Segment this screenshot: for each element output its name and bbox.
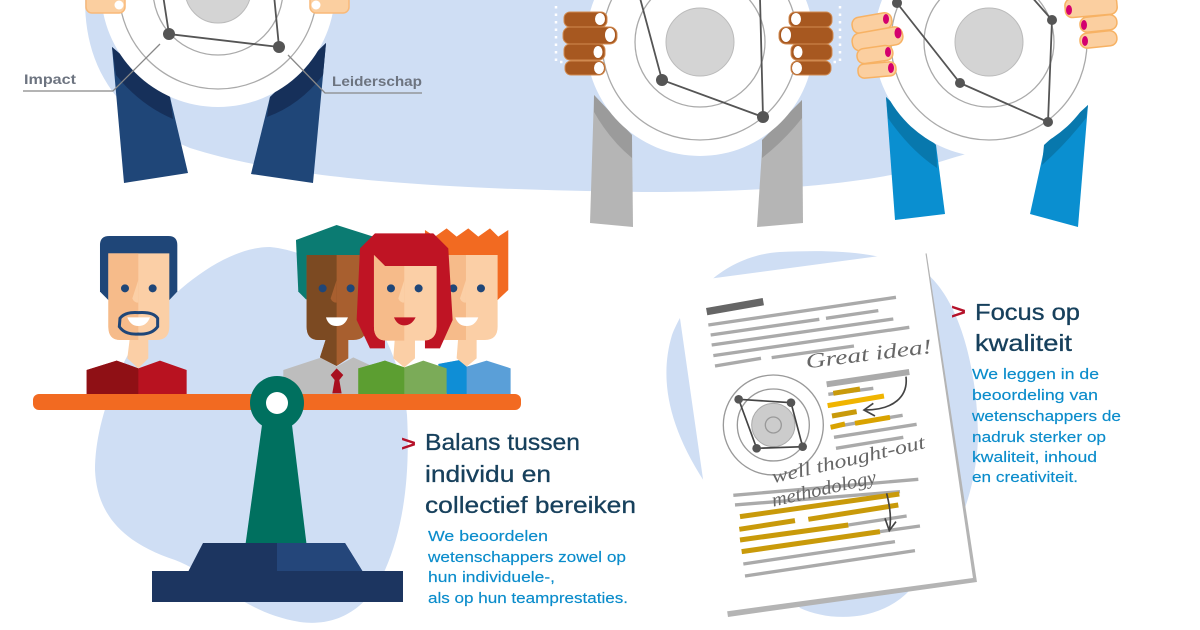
body text: focus <box>971 366 1121 486</box>
left sleeve <box>886 97 945 220</box>
right sleeve <box>1030 105 1088 227</box>
body text: balans <box>427 528 628 607</box>
mini radar chart <box>723 375 823 475</box>
heading: focus: > <box>951 299 966 324</box>
heading: balans: individu en <box>425 461 551 487</box>
body text: focus: We leggen in de <box>972 366 1099 383</box>
body text: balans: als op hun teamprestaties. <box>428 590 628 607</box>
white dotted cuffs <box>556 6 840 62</box>
skin hand right with nails <box>1064 0 1118 49</box>
brown hand left <box>563 12 617 75</box>
pivot with hole <box>250 376 304 430</box>
person: man with beard <box>87 236 187 395</box>
person: man with teal hair <box>283 225 373 395</box>
body text: focus: wetenschappers de <box>971 408 1121 425</box>
heading: focus: kwaliteit <box>975 330 1073 356</box>
hands <box>86 0 349 13</box>
figure: grey sleeves holding plate <box>556 0 840 227</box>
handwritten notes: well thought-out <box>770 432 928 488</box>
handwritten notes: methodology <box>770 467 879 512</box>
brown hand right <box>779 12 833 75</box>
teal column <box>245 425 307 548</box>
body text: focus: beoordeling van <box>972 387 1098 404</box>
label: Leiderschap <box>288 55 422 93</box>
hand-drawn arrows <box>864 377 906 531</box>
document text lines <box>707 297 920 576</box>
right sleeve <box>757 100 803 227</box>
figure: blue sleeves holding plate <box>851 0 1118 227</box>
navy base <box>188 543 363 572</box>
label: Impact <box>23 44 160 91</box>
handwritten notes <box>770 336 933 512</box>
body text: balans: hun individuele-, <box>428 569 555 586</box>
background blob: document <box>666 251 978 617</box>
handwritten notes: Great idea! <box>805 336 933 373</box>
people on the balance <box>87 225 511 395</box>
heading: balans: > <box>401 431 416 456</box>
person: woman with red hair <box>357 233 453 395</box>
heading: balans: collectief bereiken <box>425 492 636 518</box>
radar plate <box>874 0 1104 157</box>
figure: navy sleeves holding plate <box>86 0 349 183</box>
background blob: top <box>85 0 1000 192</box>
radar plate <box>586 0 814 156</box>
radar plate <box>101 0 335 107</box>
highlighted text <box>739 389 899 552</box>
balance scale <box>33 376 521 602</box>
orange beam <box>33 394 521 410</box>
paper <box>680 253 977 617</box>
person: man with orange hair <box>425 228 511 395</box>
label: Impact: Impact <box>24 71 76 87</box>
heading: balans <box>401 429 636 518</box>
body text: balans: wetenschappers zowel op <box>427 549 626 566</box>
heading: balans: Balans tussen <box>425 429 580 455</box>
document illustration <box>675 250 977 617</box>
left sleeve <box>590 95 633 227</box>
right sleeve <box>251 43 326 183</box>
label: Leiderschap: Leiderschap <box>332 73 422 89</box>
body text: balans: We beoordelen <box>428 528 548 545</box>
body text: focus: en creativiteit. <box>972 469 1078 486</box>
left sleeve <box>112 47 188 183</box>
body text: focus: nadruk sterker op <box>972 429 1106 446</box>
heading: focus: Focus op <box>975 299 1080 325</box>
background blob: balance <box>95 247 408 623</box>
body text: focus: kwaliteit, inhoud <box>972 449 1097 466</box>
heading: focus <box>951 299 1080 356</box>
skin hand left with nails <box>851 12 904 79</box>
